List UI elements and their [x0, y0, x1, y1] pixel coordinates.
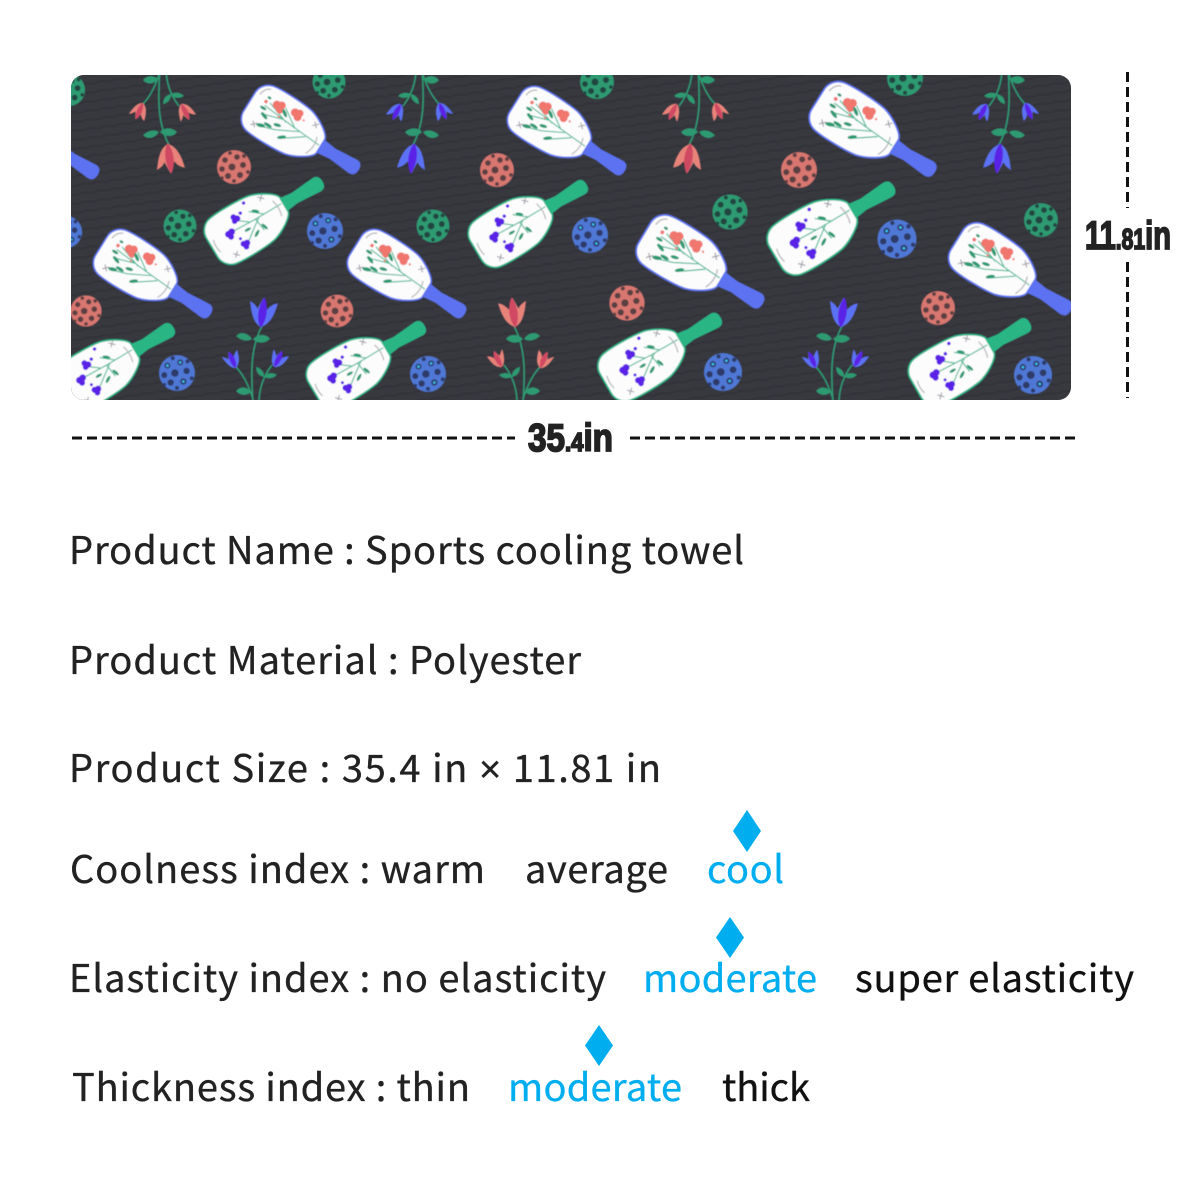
- height label: 11.81in: [1085, 214, 1171, 258]
- option: moderate selected: moderate: [508, 1057, 682, 1112]
- elasticity label: Elasticity index : no elasticity: [69, 948, 606, 1003]
- panel: towel pattern: [71, 75, 1071, 400]
- marker: diamond: [585, 1025, 613, 1066]
- height dimension: dashed line bottom: [1126, 262, 1129, 398]
- row: elasticity index: [69, 917, 1134, 1003]
- green-rim pickleball paddles: [49, 158, 1044, 417]
- blue-rim pickleball paddles: [71, 80, 1071, 320]
- row: coolness index: [70, 810, 784, 894]
- option: cool selected: cool: [707, 839, 784, 894]
- width dimension: dashed line right: [630, 436, 1075, 440]
- blue pickleballs: [50, 213, 1052, 394]
- option: moderate selected: moderate: [643, 948, 817, 1003]
- pink pickleballs: [70, 150, 955, 327]
- text: product size: Product Size : 35.4 in × 11.81 in: [69, 738, 661, 793]
- text: product material: Product Material : Polyester: [69, 630, 581, 685]
- marker: diamond: [733, 810, 761, 852]
- green pickleballs: [53, 60, 1058, 242]
- option: thick: thick: [722, 1057, 810, 1112]
- thickness label: Thickness index : thin: [72, 1057, 470, 1112]
- option: average: average: [525, 839, 668, 894]
- row: thickness index: [72, 1025, 810, 1112]
- width label: 35.4in: [528, 417, 613, 460]
- artwork: pattern motifs: [71, 75, 1071, 400]
- option: super elasticity: super elasticity: [855, 948, 1134, 1003]
- coolness label: Coolness index : warm: [70, 839, 485, 894]
- hanging and upright flowers: [128, 68, 1040, 403]
- marker: diamond: [716, 917, 744, 958]
- height dimension: dashed line top: [1126, 72, 1129, 208]
- width dimension: dashed line left: [72, 436, 515, 440]
- text: product name: Product Name : Sports cooling towel: [69, 520, 744, 575]
